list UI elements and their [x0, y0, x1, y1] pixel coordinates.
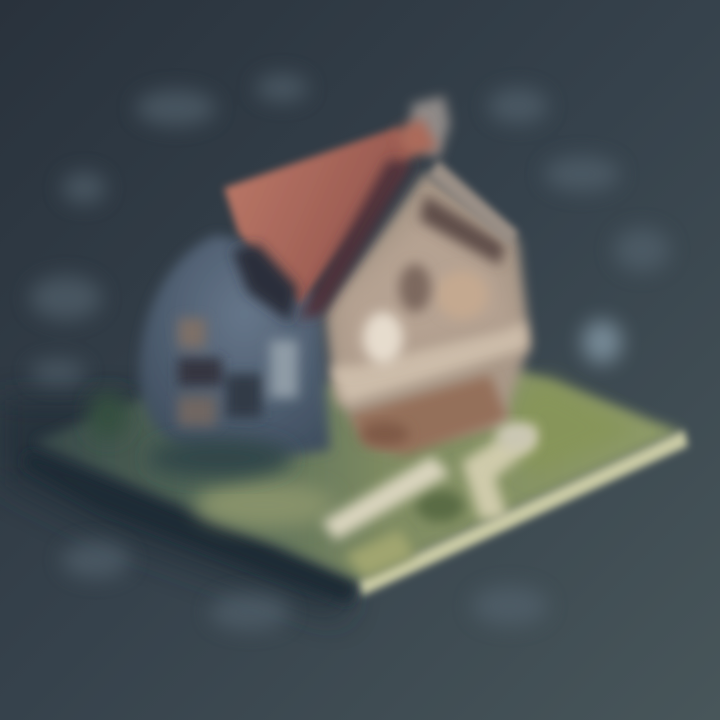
- label blob: right icon: [582, 320, 622, 364]
- label blob: top centre: [256, 74, 308, 102]
- door steps: [361, 422, 409, 446]
- chimney: [410, 96, 450, 160]
- chimney base: [395, 118, 438, 158]
- roof dark under-eave: [232, 244, 298, 322]
- window dark centre: [226, 374, 262, 418]
- window bright: [270, 340, 298, 398]
- grass patch right: [505, 378, 640, 475]
- grass patch left: [195, 481, 335, 529]
- window middle: [178, 358, 222, 386]
- house: [139, 96, 536, 478]
- label blob: bottom right: [472, 586, 548, 626]
- floating blurred labels: [30, 74, 670, 630]
- gable dark beam: [420, 195, 505, 265]
- lower wall brick: [350, 375, 508, 455]
- label blob: top left: [136, 90, 216, 126]
- label blob: left lower: [30, 360, 86, 384]
- upper wall patch: [340, 215, 515, 365]
- roof ridge dark: [298, 160, 414, 320]
- label blob: left middle: [30, 276, 102, 320]
- dark shadow behind platform: [0, 400, 350, 620]
- lawn surface: [34, 370, 682, 582]
- beige main body: [325, 172, 530, 445]
- label blob: bottom left: [62, 542, 130, 578]
- platform: [24, 370, 688, 604]
- wing shadow base: [148, 438, 292, 478]
- cream path branch: [462, 425, 535, 520]
- label blob: bottom centre: [210, 594, 290, 630]
- hedge: [416, 490, 464, 522]
- window lower: [178, 396, 216, 426]
- steps right: [496, 422, 536, 450]
- roof: [224, 128, 420, 305]
- body window dark: [399, 264, 431, 312]
- label blob: right middle: [614, 228, 670, 272]
- body window right: [436, 271, 488, 319]
- label blob: left upper: [62, 172, 106, 204]
- label blob: top right: [488, 88, 548, 124]
- body window left: [363, 312, 403, 364]
- cream path: [322, 456, 450, 540]
- window upper: [178, 318, 206, 348]
- round blue wing: [139, 235, 330, 462]
- cream platform edge: [360, 430, 688, 596]
- label blob: right upper: [544, 156, 620, 192]
- gable light trim: [428, 160, 518, 246]
- lower lawn strip: [345, 530, 415, 578]
- light band: [330, 322, 528, 404]
- platform shadow side: [24, 452, 355, 604]
- bush left: [88, 391, 128, 439]
- wing windows: [178, 318, 298, 426]
